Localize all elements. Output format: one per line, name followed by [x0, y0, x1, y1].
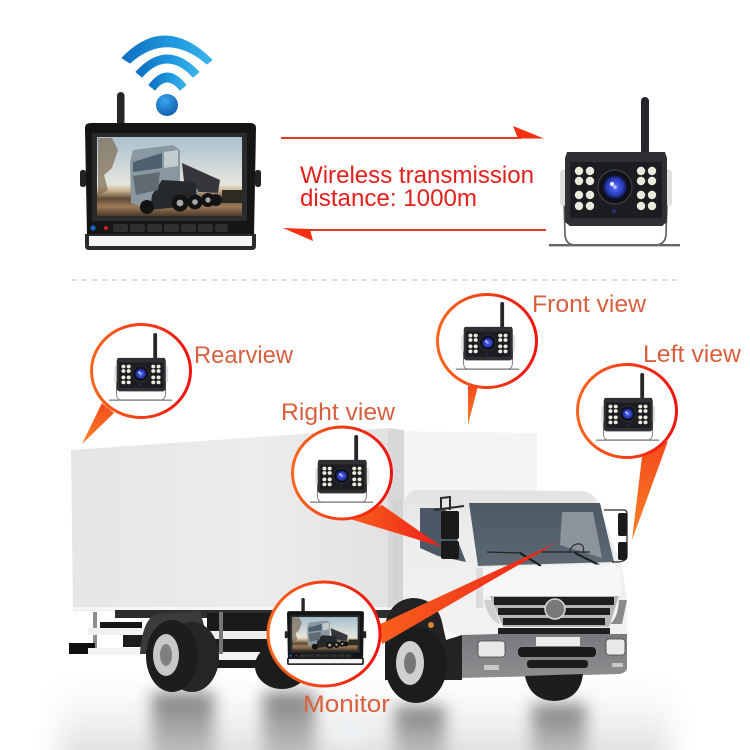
callout: front view [438, 291, 647, 425]
front wheels [385, 598, 583, 703]
callout: front view: Front view [532, 291, 647, 318]
monitor product [80, 92, 261, 250]
wireless distance text [300, 162, 534, 212]
windscreen [469, 503, 614, 566]
side window [420, 508, 466, 562]
left mirrors [434, 497, 464, 559]
truck cab [385, 490, 627, 703]
bumper and lights [462, 628, 627, 678]
truck rear wheels [140, 611, 309, 692]
callout: rearview [82, 324, 294, 444]
wireless distance text: Wireless transmission [300, 162, 534, 189]
cab face panel [480, 564, 622, 596]
callout: right view: Right view [281, 399, 396, 426]
callout: right view [281, 399, 442, 547]
icon: wifi signal [122, 36, 212, 116]
callout: monitor [268, 542, 558, 718]
right mirrors [604, 510, 627, 562]
callout: left view [578, 341, 742, 540]
wireless distance text: distance: 1000m [300, 185, 477, 212]
callout: left view: Left view [643, 341, 742, 368]
callout: monitor: Monitor [303, 691, 390, 718]
truck chassis and side bars [69, 610, 395, 668]
truck [69, 428, 627, 703]
floor with reflections [60, 680, 670, 750]
camera product [549, 97, 680, 246]
grille [484, 596, 627, 627]
arrow: monitor to camera [281, 126, 544, 139]
callout: rearview: Rearview [194, 342, 294, 369]
truck cargo box [71, 428, 537, 611]
arrow: camera to monitor [283, 228, 546, 241]
